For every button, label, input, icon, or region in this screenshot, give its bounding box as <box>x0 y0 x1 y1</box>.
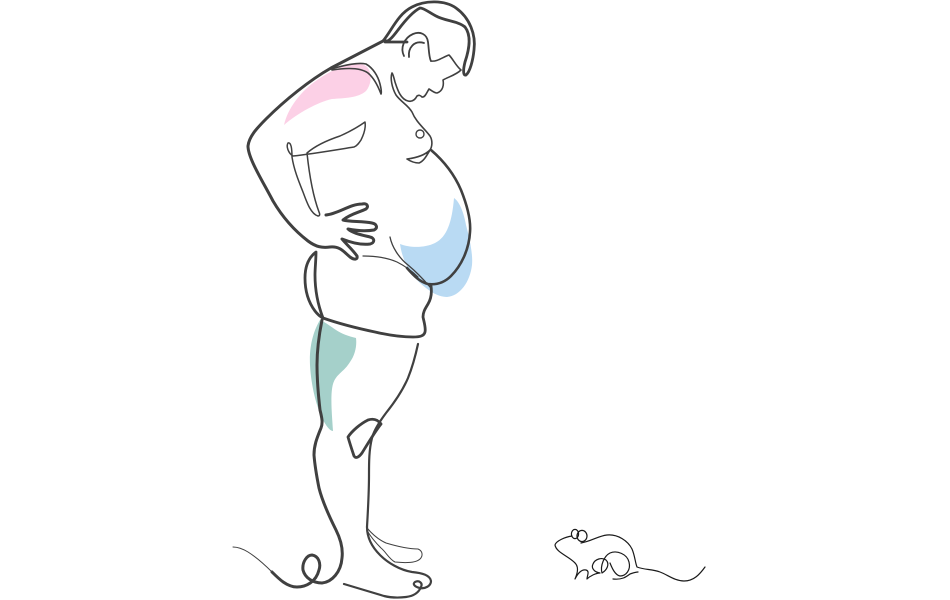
head outline <box>383 2 474 75</box>
mouse foot <box>613 572 638 579</box>
trailing line <box>233 547 272 572</box>
navel loop <box>416 130 424 138</box>
shorts <box>305 252 431 337</box>
face profile <box>391 55 461 163</box>
man figure <box>233 2 474 598</box>
front of thigh <box>367 344 418 527</box>
highlight: shoulder pink <box>284 63 371 125</box>
highlight: belly blue <box>400 198 472 297</box>
ear <box>402 33 431 61</box>
shoulder blade <box>331 63 381 94</box>
highlight: thigh teal <box>310 320 356 431</box>
mouse back and tail <box>581 535 705 581</box>
mouse ears <box>571 529 579 539</box>
line work <box>233 2 474 598</box>
back and arm <box>248 40 385 259</box>
mouse body <box>555 536 629 579</box>
back of leg <box>272 320 342 587</box>
heel shape <box>367 528 422 563</box>
inner arm <box>287 122 365 216</box>
mouse <box>555 529 705 581</box>
right foot <box>344 527 431 598</box>
knee shape <box>348 419 381 457</box>
belly <box>407 150 470 284</box>
